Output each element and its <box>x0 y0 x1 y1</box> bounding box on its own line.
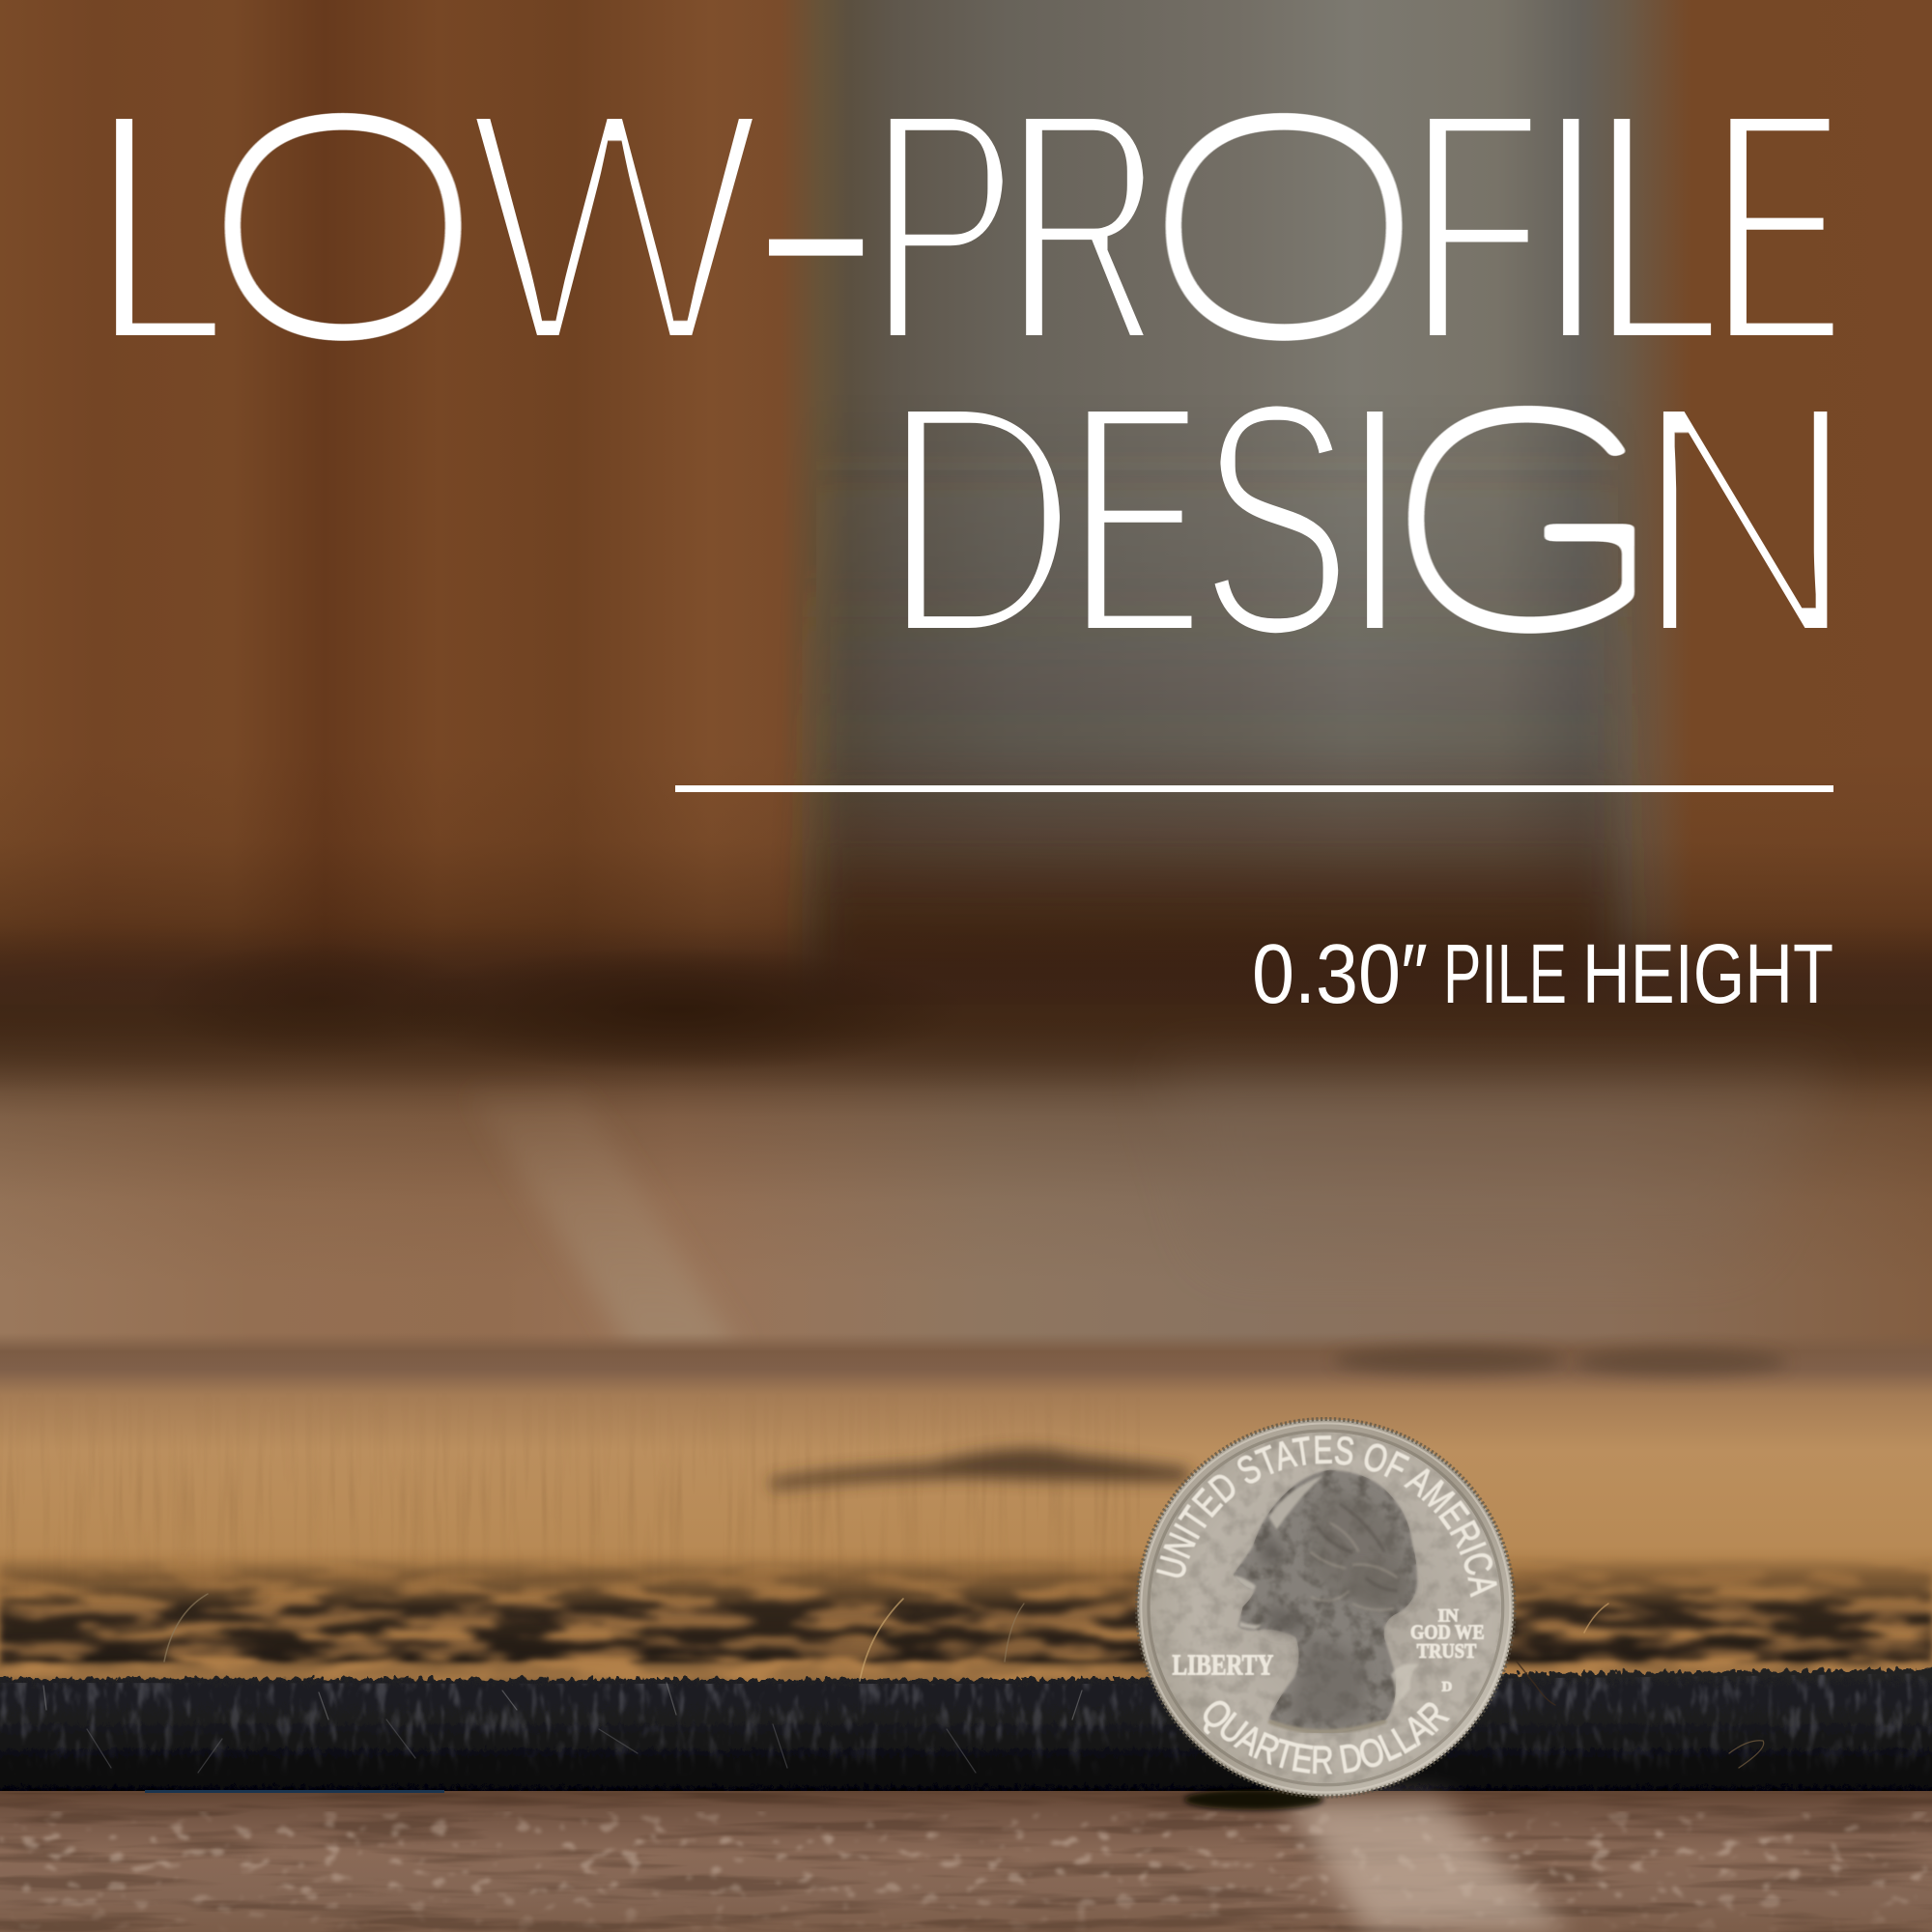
wood floor foreground <box>0 1790 1932 1932</box>
title line 2: G <box>1379 333 1672 706</box>
coin lettering: IN <box>1437 1605 1459 1626</box>
rug black bound edge <box>0 1668 1932 1811</box>
title line 1: R <box>1007 41 1161 413</box>
title line 1: E <box>1714 41 1842 413</box>
coin lettering: UNITED STATES OF AMERICA <box>1155 1435 1497 1598</box>
title line 2: D <box>881 333 1078 706</box>
coin lettering: QUARTER DOLLAR <box>1204 1700 1451 1775</box>
subtitle: pile height <box>1252 932 1833 1014</box>
coin lettering: TRUST <box>1417 1641 1477 1662</box>
title line 1: I <box>1524 41 1617 413</box>
blurred wall: wooden door frame and grey opening <box>0 0 1932 1063</box>
title line 1: P <box>869 41 1017 413</box>
title line 2: I <box>1328 333 1421 706</box>
title line 1: W <box>465 41 764 413</box>
title line 2: S <box>1200 333 1352 706</box>
title line 2: E <box>1070 333 1201 706</box>
title line 1: L <box>94 41 226 413</box>
blurred dark rug motif <box>768 1448 1188 1490</box>
coin lettering: GOD WE <box>1410 1623 1485 1644</box>
title line 1: O <box>197 41 490 413</box>
coin lettering: D <box>1442 1680 1452 1695</box>
title line 1: O <box>1138 41 1431 413</box>
coin portrait: Washington head <box>1234 1470 1418 1733</box>
title line 1: F <box>1410 41 1541 413</box>
coin lettering: LIBERTY <box>1172 1648 1273 1681</box>
coin field <box>1151 1433 1501 1783</box>
title line 1 <box>94 35 1842 634</box>
coin reeded edge and rim <box>1137 1419 1515 1797</box>
divider rule <box>675 785 1833 792</box>
title line 2 <box>881 333 1860 706</box>
blurred floor in the background <box>0 927 1932 1372</box>
rug surface: tan pile <box>0 1333 1932 1700</box>
coin shadow on the floor <box>1184 1789 1323 1810</box>
quarter coin <box>1135 1417 1517 1799</box>
title line 1: L <box>1592 41 1722 413</box>
title line 2: N <box>1631 333 1860 706</box>
coin lettering <box>1155 1435 1497 1775</box>
rug patterned border <box>0 1555 1932 1686</box>
stray rug fibres <box>43 1594 1764 1773</box>
title line 1: - <box>751 35 881 408</box>
